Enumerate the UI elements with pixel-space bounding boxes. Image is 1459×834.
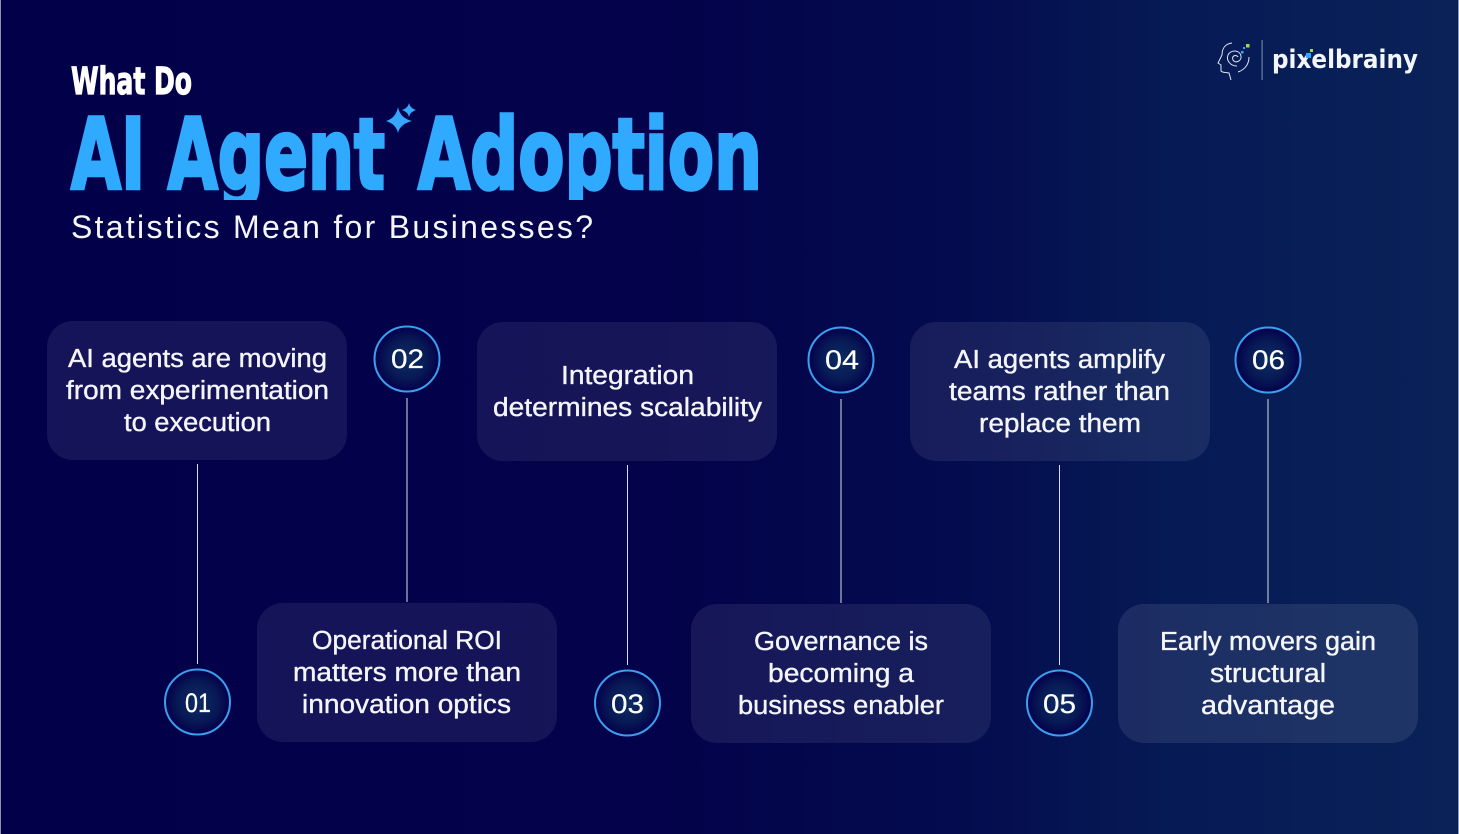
logo pixel accents [1306, 49, 1313, 58]
panel: card 1: AI agents are moving [68, 345, 327, 373]
panel: card 3: Integration [561, 362, 694, 390]
number badge 04: 04 [825, 345, 859, 375]
panel: card 6 [1118, 604, 1418, 743]
subtitle: Statistics Mean for Businesses? [71, 209, 593, 245]
number badge 01 [165, 670, 230, 734]
number badge 06: 06 [1252, 345, 1285, 375]
panel: card 5: AI agents amplify [954, 346, 1165, 374]
logo: pixelbrainy [1218, 40, 1418, 80]
panel: card 3 [477, 322, 777, 461]
number badge 02: 02 [391, 344, 424, 374]
panel: card 5: teams rather than [949, 378, 1170, 406]
title: AI Agent Adoption [70, 112, 758, 200]
number badge 02 [374, 326, 440, 392]
panel: card 3: determines scalability [493, 394, 762, 422]
panel: card 2: innovation optics [302, 691, 511, 719]
logo divider [1262, 40, 1263, 80]
title: AI Agent Adoption: Adoption [418, 98, 762, 212]
panel: card 4: business enabler [738, 692, 945, 720]
panel: card 1: to execution [124, 409, 271, 437]
number badge 01: 01 [185, 688, 211, 718]
panel: card 4 [691, 604, 991, 743]
icon: sparkles [386, 103, 416, 133]
number badge 04 [808, 328, 874, 392]
panel: card 1 [47, 321, 347, 460]
panel: card 1: from experimentation [66, 377, 329, 405]
number badge 06 [1236, 328, 1300, 392]
panel: card 2 [257, 603, 557, 742]
panel: card 4: becoming a [768, 660, 915, 688]
title: AI Agent Adoption: AI Agent [71, 98, 385, 212]
panel: card 2: Operational ROI [312, 627, 502, 655]
panel: card 5: replace them [979, 410, 1141, 438]
panel: card 6: structural [1210, 660, 1326, 688]
number badge 03: 03 [611, 689, 644, 719]
number badge 05: 05 [1043, 689, 1076, 719]
panel: card 4: Governance is [754, 628, 928, 656]
panel: card 6: Early movers gain [1160, 628, 1376, 656]
number badge 03 [595, 670, 660, 736]
logo wordmark: pixelbrainy [1272, 45, 1418, 75]
connector lines [197, 398, 1268, 665]
title: what do: What Do [71, 60, 192, 103]
panel: card 2: matters more than [293, 659, 521, 687]
icon: brain head [1218, 43, 1250, 80]
number badge 05 [1027, 670, 1092, 736]
panel: card 5 [910, 322, 1210, 461]
panel: card 6: advantage [1201, 692, 1335, 720]
